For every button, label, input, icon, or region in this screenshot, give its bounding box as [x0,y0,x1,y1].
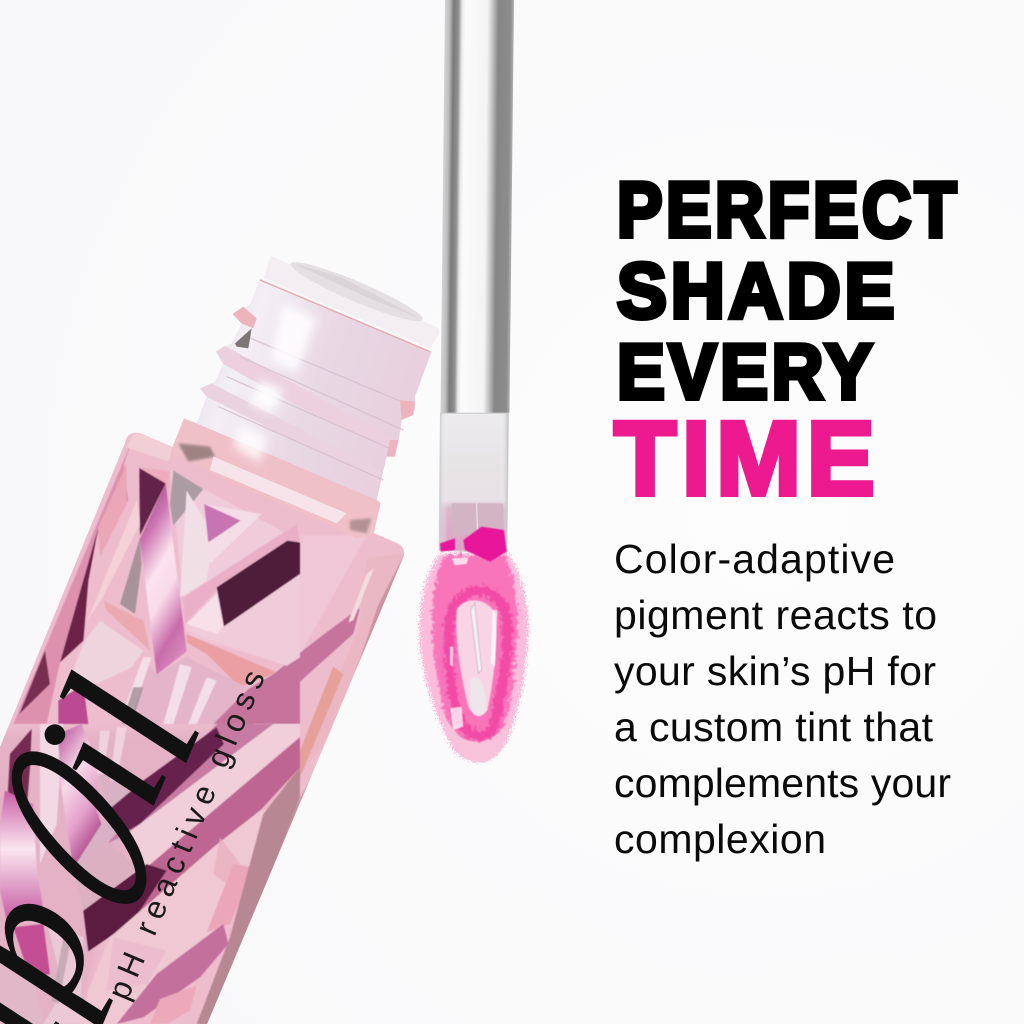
body text: complements your [614,760,951,806]
product label: pH reactive gloss [100,665,272,1005]
right side of tube: ribbons and wall [190,536,404,1024]
heading line: SHADE: SHADE [617,248,898,335]
hot pink ring [449,591,507,736]
tube body [0,420,420,1024]
heading line: EVERY: EVERY [617,328,876,415]
script logo: l: l [14,650,246,791]
metal rod [440,0,514,413]
body text: complexion [614,816,826,862]
clear core [456,600,496,716]
body text: pigment reacts to [614,592,937,638]
clear stem [439,413,508,553]
threaded neck [197,278,432,500]
heading line: TIME: TIME [614,399,881,517]
bottle neck [170,254,439,538]
body text: your skin’s pH for [614,648,936,694]
brush head with gloss [432,555,518,750]
body text: Color-adaptive [614,536,895,582]
top rim [264,256,439,348]
brush fuzz [419,553,528,762]
upper tube section [13,432,300,724]
applicator wand [419,0,528,763]
illustration: open lip oil tube [0,254,439,1024]
body text: a custom tint that [614,704,934,750]
lower tube section [0,724,300,1024]
body text [614,536,951,862]
collar [170,418,381,538]
clear bottom lobe [442,713,512,763]
magenta pigment [440,527,507,562]
heading line: PERFECT: PERFECT [617,166,960,254]
heading [614,166,960,517]
